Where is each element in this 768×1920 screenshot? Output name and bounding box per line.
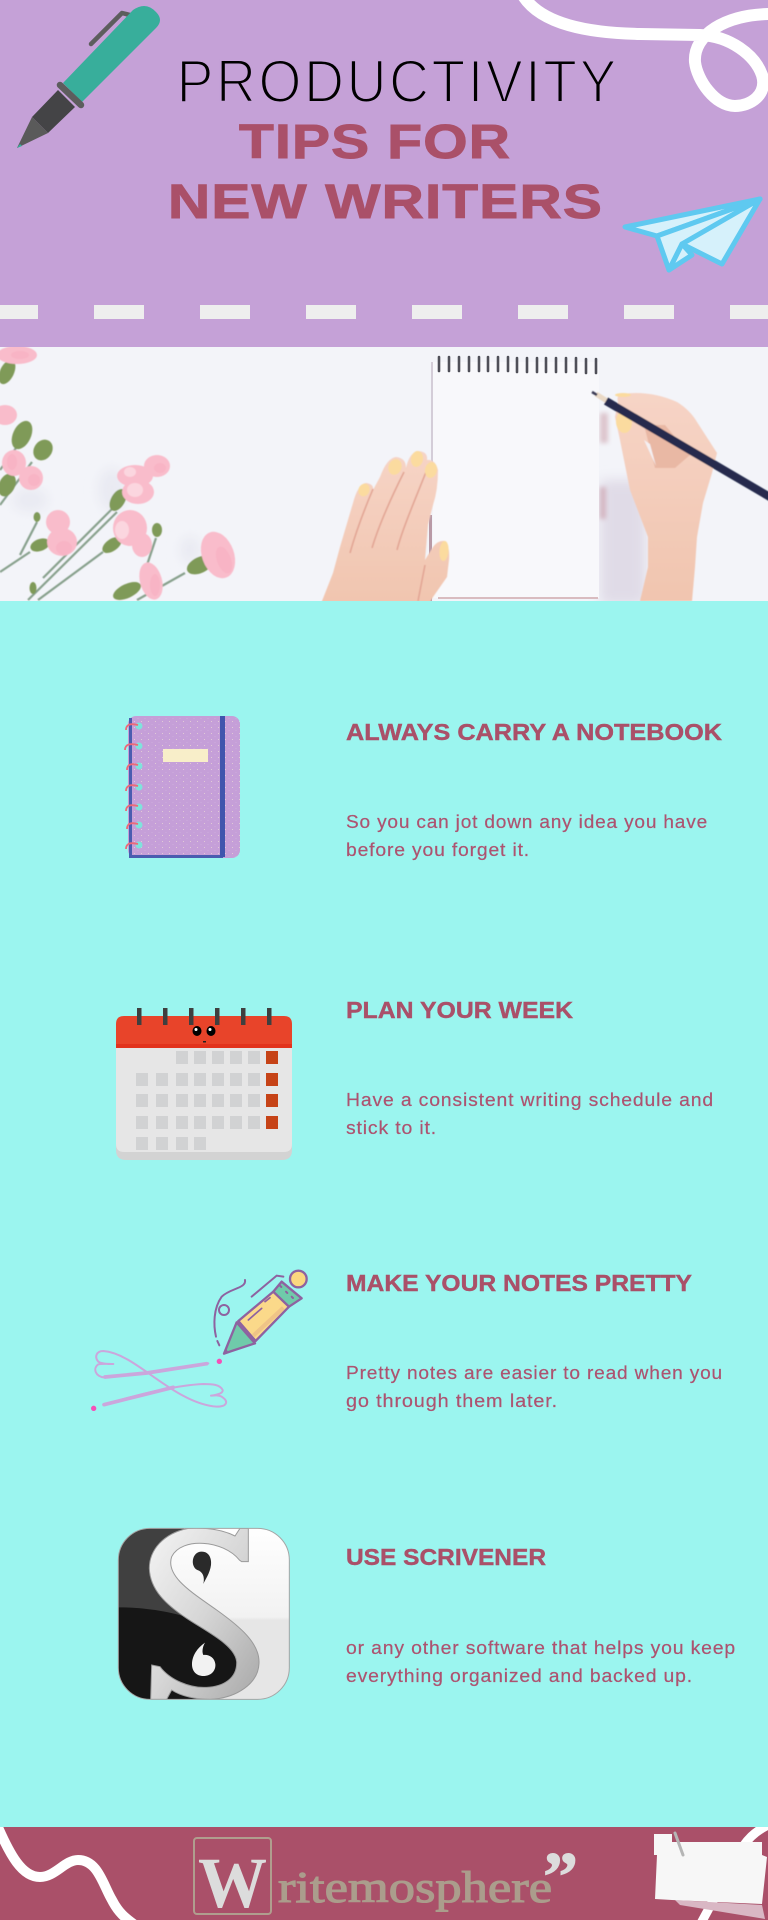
heading: plan your week: PLAN YOUR WEEK — [346, 997, 573, 1023]
icon: teal pen — [17, 6, 160, 148]
icon: purple notebook — [125, 716, 240, 858]
body text: pretty notes tip: go through them later. — [346, 1390, 558, 1411]
logo: writemosphere: ” — [543, 1839, 578, 1916]
decoration: white squiggle — [522, 0, 768, 106]
title: new writers: NEW WRITERS — [168, 176, 603, 229]
heading: always carry a notebook: ALWAYS CARRY A NOTEBOOK — [346, 719, 722, 745]
body text: notebook tip: before you forget it. — [346, 839, 530, 860]
body text: scrivener tip: everything organized and backed up. — [346, 1665, 693, 1686]
heading: make your notes pretty: MAKE YOUR NOTES PRETTY — [346, 1270, 692, 1296]
panel: tip 4 scrivener — [118, 1525, 736, 1702]
panel: tip 2 plan your week — [116, 997, 714, 1160]
title: productivity: PRODUCTIVITY — [177, 49, 616, 116]
body text: scrivener tip: or any other software that helps you keep — [346, 1637, 736, 1658]
body text: pretty notes tip: Pretty notes are easier to read when you — [346, 1362, 723, 1383]
body text: scrivener tip — [346, 1637, 736, 1686]
divider: dashed line — [0, 305, 768, 319]
panel: header — [0, 0, 768, 347]
title: tips for: TIPS FOR — [239, 116, 511, 169]
right hand with pencil — [592, 392, 768, 601]
body text: pretty notes tip — [346, 1362, 723, 1411]
decoration: right white squiggle — [700, 1822, 768, 1920]
body text: notebook tip — [346, 811, 708, 860]
body text: plan tip: Have a consistent writing schedule and — [346, 1089, 714, 1110]
icon: scrivener logo — [118, 1525, 292, 1702]
left hand — [318, 450, 449, 605]
body text: plan tip — [346, 1089, 714, 1138]
body text: notebook tip: So you can jot down any idea you have — [346, 811, 708, 832]
heading: use scrivener: USE SCRIVENER — [346, 1544, 546, 1570]
body text: plan tip: stick to it. — [346, 1117, 437, 1138]
panel: tip 3 pretty notes — [91, 1270, 723, 1411]
icon: pen with scribble — [91, 1271, 307, 1411]
photo: hands writing on notepad with flowers — [0, 346, 768, 605]
panel: footer — [0, 1822, 768, 1920]
logo: writemosphere: ritemosphere — [278, 1863, 552, 1912]
icon: sticky note with paper clip — [654, 1833, 767, 1919]
decoration: left white squiggle — [0, 1825, 135, 1920]
panel: tip 1 notebook — [125, 716, 722, 860]
logo: writemosphere — [194, 1838, 578, 1920]
flowers — [0, 346, 241, 604]
notepad — [429, 357, 646, 605]
icon: calendar — [116, 1008, 292, 1160]
icon: paper plane — [625, 199, 760, 270]
